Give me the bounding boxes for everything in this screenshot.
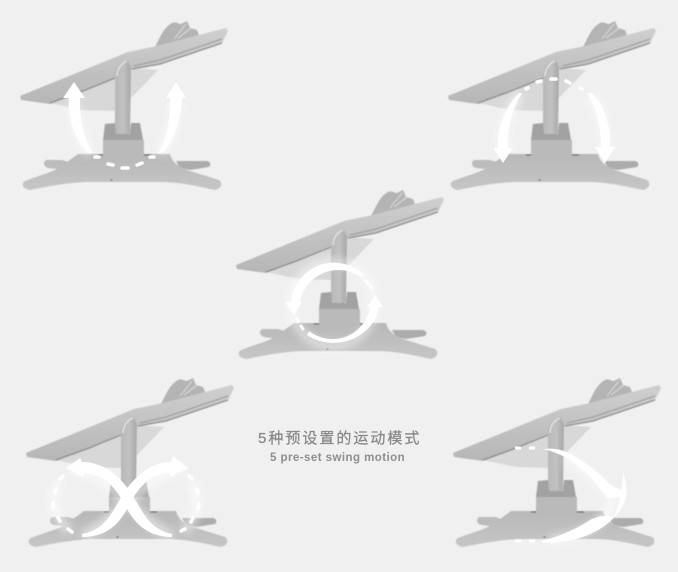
dashed link between arrows <box>95 157 154 168</box>
icon: upper sweep arrow <box>543 449 627 498</box>
panel: swing motion 5, curved sweep arrow <box>453 378 661 547</box>
icon: lower sweep arrow <box>541 473 626 543</box>
glow behind figure eight <box>54 470 197 535</box>
seat illustration 4 <box>26 378 234 547</box>
icon: circular arrow bottom right <box>307 295 383 343</box>
icon: right downward arrow <box>587 93 615 163</box>
icon: left downward arrow <box>493 93 522 163</box>
glow behind arrows 1 <box>74 100 176 153</box>
dashes bottom <box>515 540 535 542</box>
seat illustration 2 <box>448 21 656 190</box>
glow behind circle <box>291 262 375 346</box>
dashes of figure eight <box>53 476 199 532</box>
seat illustration 1 <box>20 21 228 190</box>
dashed link over arrows <box>526 79 582 89</box>
icon: figure-eight arrow left <box>66 458 172 537</box>
icon: circular arrow top left <box>285 263 364 315</box>
panel: swing motion 1, up and down arrows <box>20 21 228 190</box>
icon: right upward arrow <box>158 82 186 153</box>
glow behind sweep <box>550 458 612 540</box>
icon: left upward arrow <box>63 82 93 153</box>
panel: swing motion 2, downward arrows <box>448 21 656 190</box>
caption <box>258 430 421 464</box>
heading: Chinese title: 5种预设置的运动模式 <box>258 430 421 447</box>
dashes top <box>515 446 535 450</box>
dashes on circle <box>297 281 372 329</box>
seat illustration 5 <box>453 378 661 547</box>
seat illustration 3 <box>236 190 444 359</box>
panel: swing motion 4, figure-eight arrows <box>26 378 234 547</box>
subheading: English title: 5 pre-set swing motion <box>270 452 405 464</box>
icon: figure-eight arrow right <box>82 456 188 537</box>
panel: swing motion 3, circular arrows <box>236 190 444 359</box>
glow behind arrows 2 <box>503 95 606 150</box>
